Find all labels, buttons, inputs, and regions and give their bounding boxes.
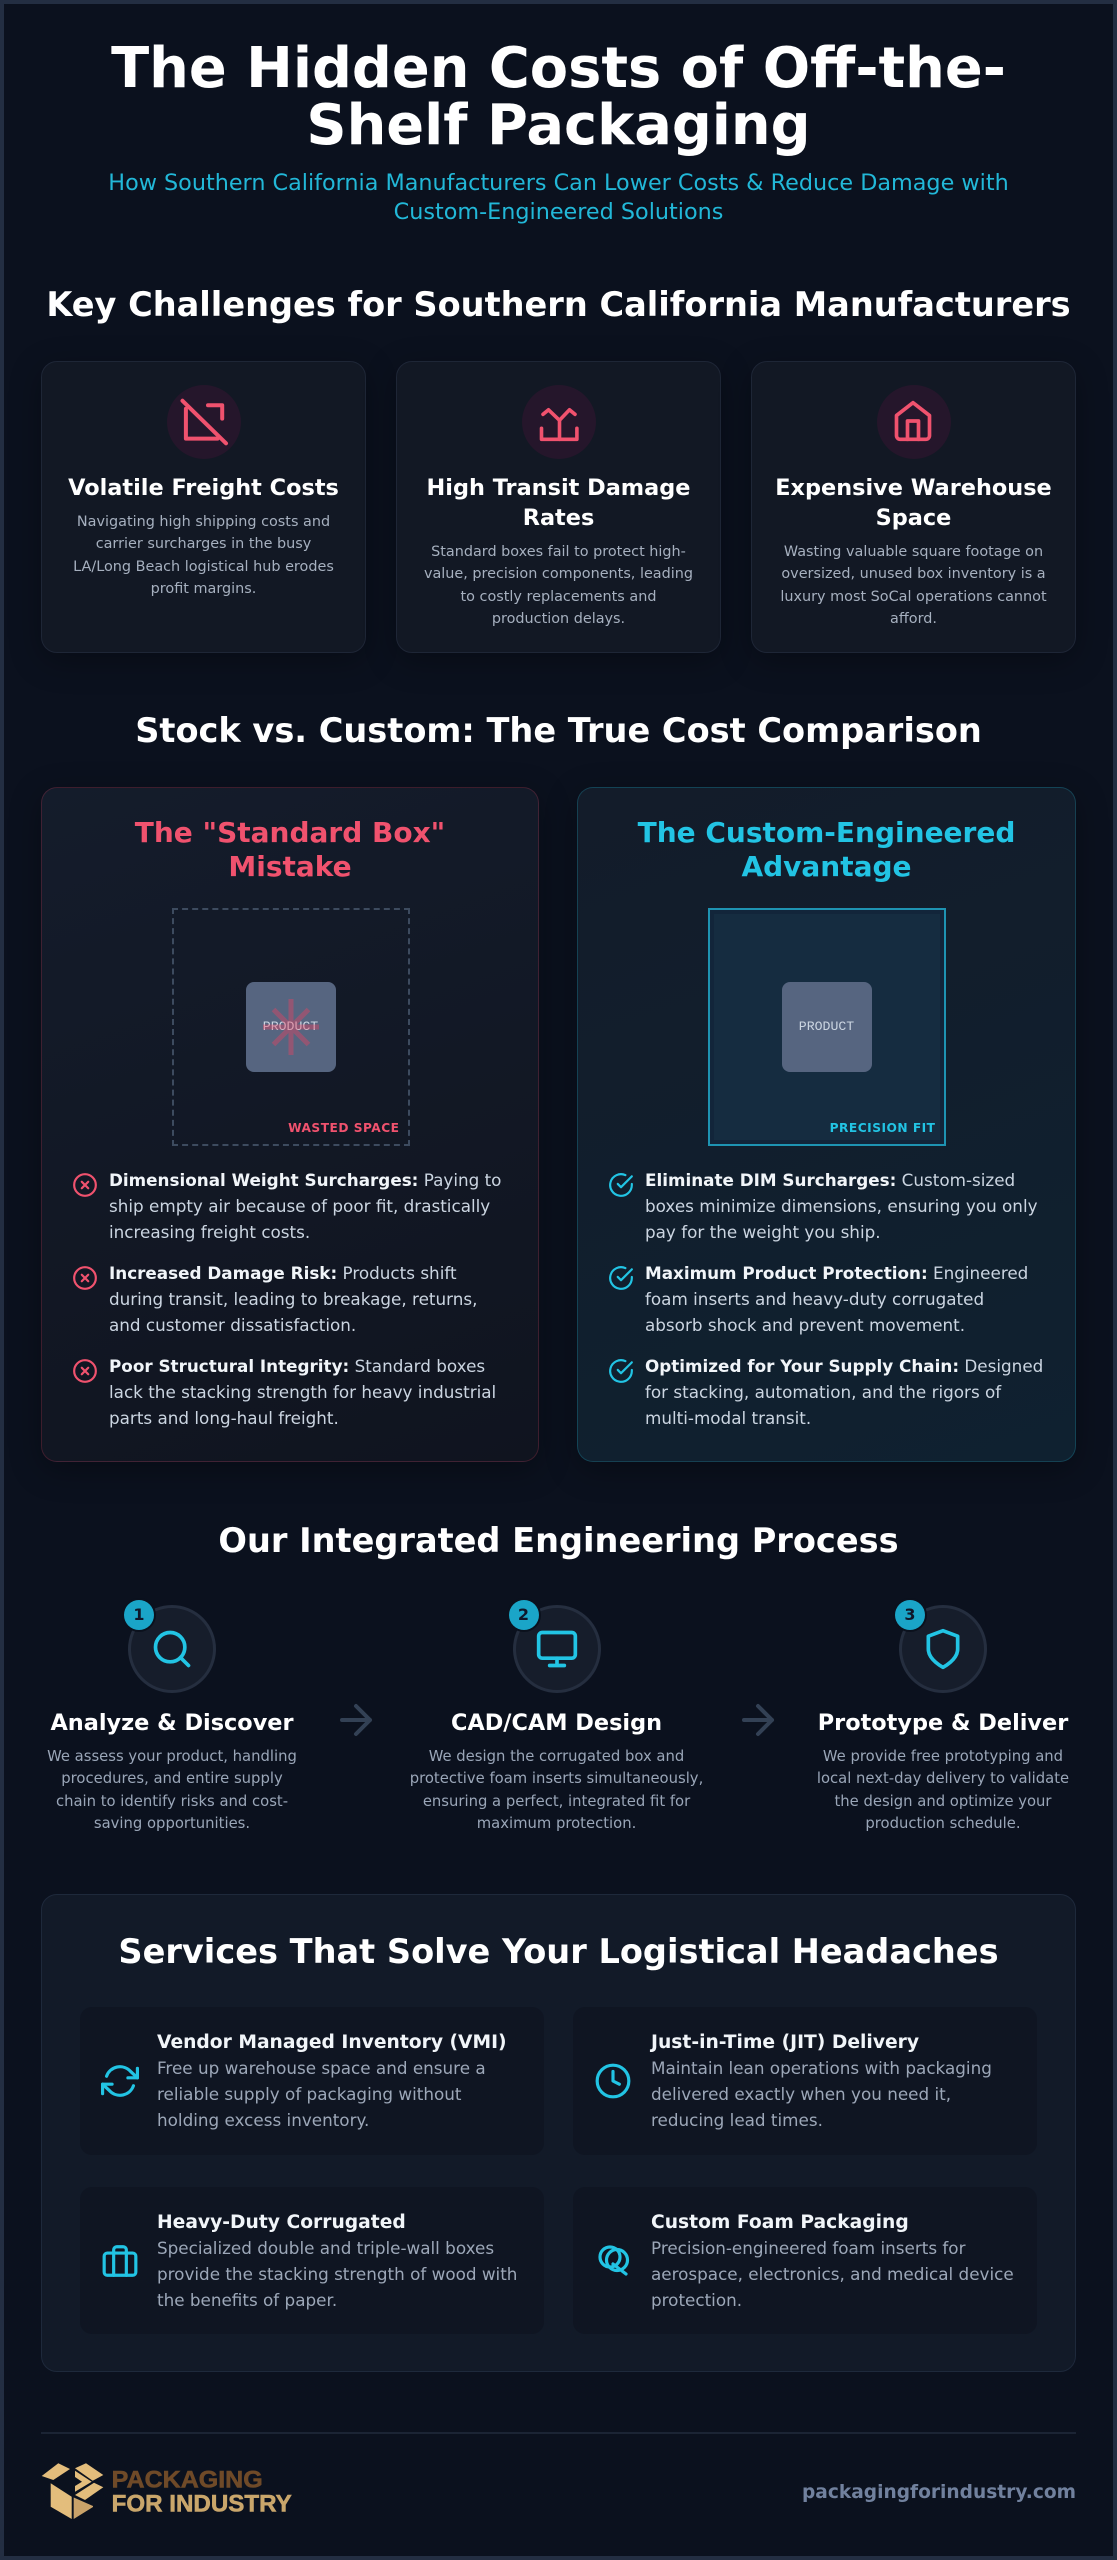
- service text: [157, 2058, 486, 2130]
- panel heading: [638, 816, 1015, 883]
- card text: luxury most SoCal operations cannot: [780, 589, 1047, 605]
- diagram: fitted box: [708, 908, 946, 1146]
- service text: [651, 2234, 1014, 2312]
- icon: refresh: [101, 2065, 139, 2097]
- product block: [246, 982, 336, 1072]
- list item: dimensional weight: [73, 1170, 501, 1242]
- panel: high transit damage rates: [396, 361, 721, 653]
- arrow: step 1 to 2: [340, 1704, 372, 1736]
- card heading: [427, 475, 690, 531]
- heading: comparison: Stock vs. Custom: The True Cost Comparison: [135, 711, 982, 750]
- logo: PACKAGING: [112, 2466, 263, 2494]
- service text: aerospace, electronics, and medical device: [651, 2264, 1014, 2284]
- card text: afford.: [890, 611, 937, 627]
- icon: x circle: [73, 1173, 97, 1197]
- icon: check circle: [609, 1359, 633, 1383]
- list text: [645, 1170, 1038, 1242]
- list item: structural integrity: [73, 1356, 496, 1428]
- service text: provide the stacking strength of wood with: [157, 2264, 517, 2284]
- list text: Eliminate DIM Surcharges: Custom-sized: [645, 1170, 1015, 1190]
- service text: Specialized double and triple-wall boxes: [157, 2238, 494, 2258]
- list text: Optimized for Your Supply Chain: Designed: [645, 1356, 1043, 1376]
- heading: key challenges: Key Challenges for Southern California Manufacturers: [46, 285, 1071, 324]
- title: Shelf Packaging: [306, 93, 811, 158]
- step text: local next-day delivery to validate: [817, 1770, 1069, 1787]
- panel heading: Mistake: [228, 850, 352, 883]
- list text: boxes minimize dimensions, ensuring you only: [645, 1196, 1038, 1216]
- card heading: Space: [876, 505, 951, 531]
- list text: during transit, leading to breakage, returns,: [109, 1289, 477, 1309]
- list text: foam inserts and heavy-duty corrugated: [645, 1289, 984, 1309]
- card text: Standard boxes fail to protect high-: [431, 544, 686, 560]
- card text: Navigating high shipping costs and: [77, 514, 330, 530]
- label: precision fit: PRECISION FIT: [830, 1121, 936, 1135]
- service text: holding excess inventory.: [157, 2110, 369, 2130]
- step text: protective foam inserts simultaneously,: [410, 1770, 703, 1787]
- service heading: Heavy-Duty Corrugated: [157, 2212, 406, 2233]
- product block: PRODUCT: [799, 1019, 854, 1034]
- step number: 1: [133, 1605, 145, 1624]
- icon: damaged tray: [522, 385, 596, 459]
- icon: x circle: [73, 1266, 97, 1290]
- icon: magnifier: [128, 1605, 216, 1693]
- service text: Maintain lean operations with packaging: [651, 2058, 992, 2078]
- service text: [651, 2058, 992, 2130]
- service text: reliable supply of packaging without: [157, 2084, 461, 2104]
- list text: [109, 1170, 501, 1242]
- service text: Precision-engineered foam inserts for: [651, 2238, 965, 2258]
- list text: multi-modal transit.: [645, 1408, 811, 1428]
- list item: supply chain: [609, 1356, 1043, 1428]
- step text: [47, 1748, 297, 1832]
- icon: crossed-out crop: [167, 385, 241, 459]
- service text: reducing lead times.: [651, 2110, 823, 2130]
- icon: foam rings: [594, 2242, 632, 2280]
- card text: carrier surcharges in the busy: [96, 536, 311, 552]
- list text: increasing freight costs.: [109, 1222, 310, 1242]
- icon: monitor: [512, 1605, 600, 1693]
- step 3: prototype and deliver: [817, 1600, 1069, 1832]
- label: wasted space: WASTED SPACE: [288, 1121, 400, 1135]
- icon: check circle: [609, 1173, 633, 1197]
- title: The Hidden Costs of Off-the-: [111, 36, 1006, 101]
- list text: absorb shock and prevent movement.: [645, 1315, 965, 1335]
- card text: Wasting valuable square footage on: [784, 544, 1043, 560]
- panel: services: [41, 1894, 1076, 2372]
- card text: [73, 514, 334, 597]
- subtitle: Custom-Engineered Solutions: [394, 199, 723, 225]
- panel heading: [134, 816, 445, 883]
- card text: oversized, unused box inventory is a: [781, 566, 1046, 582]
- card text: LA/Long Beach logistical hub erodes: [73, 559, 334, 575]
- icon: briefcase: [102, 2245, 138, 2277]
- list text: Poor Structural Integrity: Standard boxes: [109, 1356, 485, 1376]
- icon: x circle: [73, 1359, 97, 1383]
- card heading: Volatile Freight Costs: [68, 475, 339, 501]
- panel: custom-engineered advantage: [577, 787, 1076, 1462]
- service text: protection.: [651, 2290, 742, 2310]
- step number: [508, 1600, 538, 1630]
- services heading: Services That Solve Your Logistical Headaches: [118, 1932, 999, 1971]
- list text: [109, 1263, 477, 1335]
- service text: delivered exactly when you need it,: [651, 2084, 951, 2104]
- service: foam: [573, 2187, 1037, 2334]
- panel heading: The Custom-Engineered: [638, 816, 1015, 849]
- list text: Increased Damage Risk: Products shift: [109, 1263, 457, 1283]
- panel heading: The "Standard Box": [135, 816, 445, 849]
- step text: [410, 1748, 703, 1832]
- step 2: CAD/CAM design: [410, 1600, 703, 1832]
- step number: [895, 1600, 925, 1630]
- step text: saving opportunities.: [94, 1815, 250, 1832]
- step text: production schedule.: [865, 1815, 1021, 1832]
- step heading: CAD/CAM Design: [451, 1710, 662, 1736]
- inner fill: [714, 914, 940, 1140]
- card heading: [775, 475, 1052, 531]
- website: packagingforindustry.com: [802, 2482, 1076, 2503]
- step text: [817, 1748, 1069, 1832]
- list text: parts and long-haul freight.: [109, 1408, 339, 1428]
- step text: maximum protection.: [477, 1815, 636, 1832]
- card text: to costly replacements and: [461, 589, 656, 605]
- footer: [41, 2432, 1076, 2532]
- logo: [41, 2460, 301, 2522]
- product block: PRODUCT: [263, 1019, 318, 1034]
- step text: We provide free prototyping and: [823, 1748, 1063, 1765]
- service: VMI: [80, 2007, 544, 2155]
- logo: FOR INDUSTRY: [112, 2490, 292, 2518]
- title: [111, 36, 1006, 158]
- card text: profit margins.: [151, 581, 256, 597]
- list text: [645, 1263, 1028, 1335]
- step text: We assess your product, handling: [47, 1748, 297, 1765]
- step number: [124, 1600, 154, 1630]
- step heading: Analyze & Discover: [50, 1710, 294, 1736]
- panel: volatile freight costs: [41, 361, 366, 653]
- icon: warehouse home: [877, 385, 951, 459]
- service text: the benefits of paper.: [157, 2290, 337, 2310]
- list item: DIM surcharges: [609, 1170, 1038, 1242]
- step 1: analyze and discover: [47, 1600, 297, 1832]
- step number: 3: [904, 1605, 916, 1624]
- card heading: Expensive Warehouse: [775, 475, 1052, 501]
- service text: Free up warehouse space and ensure a: [157, 2058, 486, 2078]
- list text: lack the stacking strength for heavy industrial: [109, 1382, 496, 1402]
- panel: expensive warehouse space: [751, 361, 1076, 653]
- arrow: step 2 to 3: [742, 1704, 774, 1736]
- panel: standard box mistake: [41, 787, 539, 1462]
- icon: clock: [596, 2064, 630, 2098]
- step text: the design and optimize your: [834, 1793, 1052, 1810]
- step text: procedures, and entire supply: [61, 1770, 283, 1787]
- list text: ship empty air because of poor fit, drastically: [109, 1196, 490, 1216]
- card text: value, precision components, leading: [424, 566, 693, 582]
- heading: process: Our Integrated Engineering Process: [218, 1520, 899, 1560]
- service heading: Just-in-Time (JIT) Delivery: [651, 2032, 919, 2053]
- card heading: Rates: [523, 505, 594, 531]
- product block: [782, 982, 872, 1072]
- list text: pay for the weight you ship.: [645, 1222, 881, 1242]
- service heading: Vendor Managed Inventory (VMI): [157, 2032, 507, 2053]
- service text: [157, 2234, 517, 2312]
- list text: and customer dissatisfaction.: [109, 1315, 356, 1335]
- step text: ensuring a perfect, integrated fit for: [423, 1793, 690, 1810]
- list item: protection: [609, 1263, 1028, 1335]
- step number: 2: [518, 1605, 529, 1624]
- panel heading: Advantage: [741, 850, 912, 883]
- icon: shield: [899, 1605, 987, 1693]
- subtitle: [108, 170, 1009, 225]
- card text: production delays.: [492, 611, 625, 627]
- card heading: High Transit Damage: [427, 475, 690, 501]
- diagram: oversized box: [172, 908, 410, 1146]
- subtitle: How Southern California Manufacturers Can Lower Costs & Reduce Damage with: [108, 170, 1009, 196]
- service: corrugated: [80, 2187, 544, 2334]
- list text: Maximum Product Protection: Engineered: [645, 1263, 1028, 1283]
- service heading: Custom Foam Packaging: [651, 2212, 909, 2233]
- step heading: Prototype & Deliver: [818, 1710, 1068, 1736]
- service: JIT: [573, 2007, 1037, 2155]
- list item: damage risk: [73, 1263, 477, 1335]
- step text: We design the corrugated box and: [429, 1748, 684, 1765]
- card text: [424, 544, 693, 627]
- list text: for stacking, automation, and the rigors of: [645, 1382, 1001, 1402]
- list text: Dimensional Weight Surcharges: Paying to: [109, 1170, 501, 1190]
- list text: [645, 1356, 1043, 1428]
- step text: chain to identify risks and cost-: [56, 1793, 288, 1810]
- card text: [780, 544, 1047, 627]
- icon: check circle: [609, 1266, 633, 1290]
- list text: [109, 1356, 496, 1428]
